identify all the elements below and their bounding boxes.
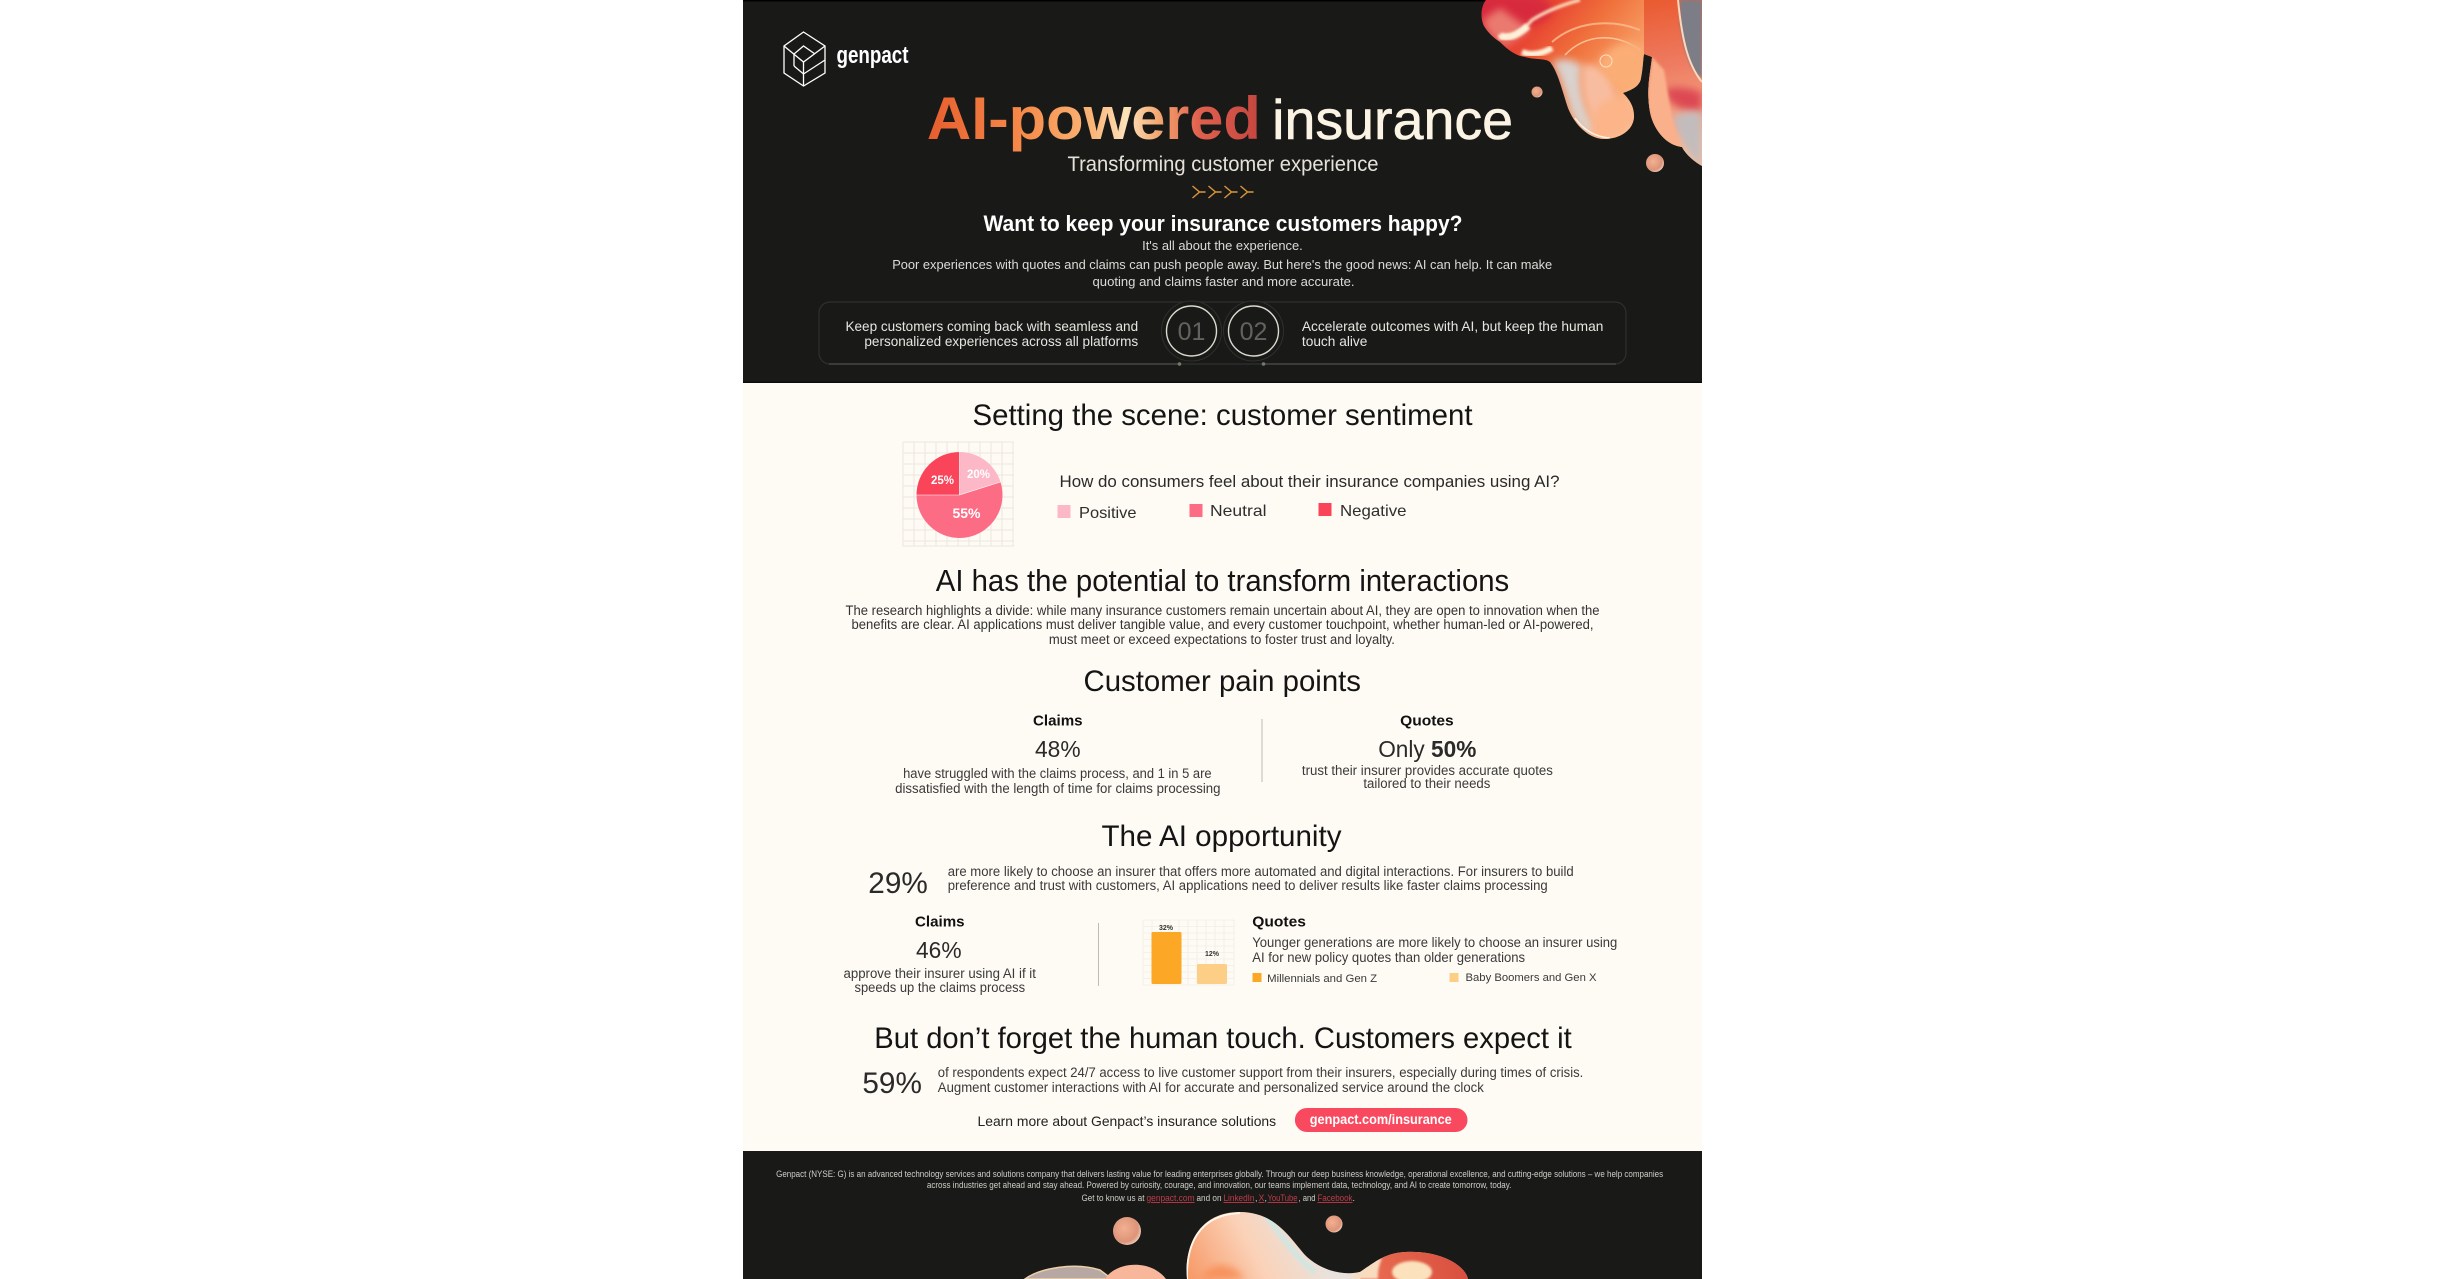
subtitle: Transforming customer experience: [1068, 153, 1378, 176]
decorative blob: footer centre: [1186, 1212, 1468, 1279]
title: insurance: [1272, 88, 1513, 151]
text block: social links: genpact.com: [1146, 1193, 1194, 1203]
text block: research divide: benefits are clear. AI applications must deliver tangible value, and every customer touchpoint, whether human-led or AI-powered,: [852, 617, 1594, 632]
takeaway 01 text: personalized experiences across all platforms: [864, 333, 1138, 349]
text block: social links: Get to know us at: [1082, 1193, 1145, 1203]
text block: social links: ,: [1264, 1193, 1267, 1203]
text block: social links: X: [1258, 1193, 1264, 1203]
text block: automated interactions: preference and trust with customers, AI applications need to deliver results like faster claims processing: [948, 878, 1548, 893]
text block: social links: YouTube: [1268, 1193, 1298, 1203]
panel: opportunity claims: Claims: [915, 914, 965, 930]
pie chart: customer sentiment: 25%: [931, 475, 954, 487]
text block: social links: [1082, 1193, 1355, 1203]
chart legend: sentiment: Neutral: [1210, 503, 1266, 520]
panel: cream body: [743, 383, 1702, 1151]
bar chart: quotes by generation: 32%: [1159, 925, 1174, 932]
decorative blob: top right: [1468, 0, 1704, 170]
panel: pain point claims: dissatisfied with the length of time for claims processing: [895, 781, 1220, 796]
decorative blob: footer left: [1025, 1265, 1166, 1279]
panel: pain point quotes: Only 50%: [1378, 736, 1476, 762]
button: genpact.com/insurance: genpact.com/insurance: [1310, 1112, 1452, 1127]
bar chart: quotes by generation: 12%: [1205, 951, 1220, 958]
heading: human touch: But don’t forget the human touch. Customers expect it: [874, 1022, 1572, 1055]
panel: pain point claims: 48%: [1035, 736, 1081, 762]
decorative sphere: small: [1532, 86, 1542, 98]
icon: orange arrow row: [1192, 186, 1254, 198]
panel: pain point quotes: tailored to their needs: [1363, 776, 1491, 791]
panel: opportunity quotes: [1252, 914, 1617, 985]
intro text block: Poor experiences with quotes and claims can push people away. But here's the good news: AI can help. It can make: [892, 257, 1552, 272]
panel: opportunity quotes: Younger generations are more likely to choose an insurer using: [1252, 934, 1617, 950]
takeaway 02 text: Accelerate outcomes with AI, but keep the human: [1302, 318, 1603, 334]
panel: pain point claims: have struggled with the claims process, and 1 in 5 are: [903, 766, 1212, 781]
text block: social links: , and: [1298, 1193, 1316, 1203]
icon: genpact hexagon: [784, 32, 825, 86]
text block: live support: [938, 1065, 1583, 1095]
text block: research divide: [846, 603, 1600, 647]
chart legend: generations: Millennials and Gen Z: [1267, 973, 1377, 985]
panel: opportunity claims: [844, 914, 1036, 995]
logo wordmark: genpact: [836, 42, 909, 69]
panel: key takeaways 01 and 02: [819, 301, 1626, 366]
pie chart: customer sentiment: 20%: [967, 469, 990, 481]
badge 02: [1224, 301, 1284, 361]
pie chart: customer sentiment: 55%: [952, 505, 981, 521]
decorative sphere: footer right: [1326, 1216, 1342, 1232]
intro text block: It's all about the experience.: [1142, 238, 1303, 253]
panel: opportunity claims: approve their insurer using AI if it: [844, 966, 1036, 981]
panel: opportunity quotes: AI for new policy quotes than older generations: [1252, 949, 1525, 965]
takeaway 01 text: [846, 318, 1138, 349]
badge 01: 01: [1178, 318, 1205, 346]
infographic canvas: [743, 0, 1702, 1279]
takeaway 01 text: Keep customers coming back with seamless and: [846, 318, 1138, 334]
badge 01: [1162, 301, 1222, 361]
panel: dark footer: [743, 1151, 1702, 1279]
takeaway 02 text: [1302, 318, 1603, 349]
text block: company boilerplate: across industries get ahead and stay ahead. Powered by curiosity, courage, and innovation, our teams implement data, technology, and AI to create tomorrow, today.: [927, 1180, 1511, 1190]
chart legend: sentiment: Negative: [1340, 503, 1407, 520]
text block: social links: ,: [1255, 1193, 1257, 1203]
chart legend: sentiment: Positive: [1079, 505, 1137, 522]
panel: pain point quotes: trust their insurer provides accurate quotes: [1302, 763, 1553, 778]
text block: company boilerplate: Genpact (NYSE: G) is an advanced technology services and solutions company that delivers lasting value for leading enterprises globally. Through our deep business knowledge, operational excellence, and cutting-edge solutions – we help companies: [776, 1169, 1664, 1179]
intro heading: Want to keep your insurance customers happy?: [984, 211, 1462, 236]
chart legend: generations: Baby Boomers and Gen X: [1466, 972, 1597, 984]
panel: pain point claims: [895, 712, 1220, 796]
text block: research divide: The research highlights a divide: while many insurance customers remain uncertain about AI, they are open to innovation when the: [846, 603, 1600, 618]
text block: live support: Augment customer interactions with AI for accurate and personalized service around the clock: [938, 1080, 1484, 1095]
panel: dark header: [743, 0, 1702, 383]
icon: connector dots: [1178, 362, 1265, 366]
heading: setting the scene: Setting the scene: customer sentiment: [972, 399, 1473, 432]
chart legend: sentiment: [1058, 503, 1407, 522]
decorative sphere: footer left: [1113, 1217, 1141, 1245]
text block: social links: .: [1352, 1193, 1355, 1203]
heading: the AI opportunity: The AI opportunity: [1102, 820, 1342, 853]
pie chart: customer sentiment: [903, 442, 1014, 546]
badge 02: 02: [1240, 318, 1267, 346]
text block: automated interactions: [948, 864, 1574, 893]
heading: customer pain points: Customer pain points: [1084, 665, 1361, 698]
text block: research divide: must meet or exceed expectations to foster trust and loyalty.: [1049, 632, 1395, 647]
title: AI-powered: [927, 85, 1261, 152]
text block: social links: and on: [1196, 1193, 1222, 1203]
text block: automated interactions: are more likely to choose an insurer that offers more automated and digital interactions. For insurers to build: [948, 864, 1574, 879]
intro text block: [892, 238, 1552, 289]
stat: 59%: 59%: [862, 1067, 922, 1100]
call to action text: Learn more about Genpact’s insurance solutions: [978, 1113, 1276, 1129]
text block: social links: LinkedIn: [1224, 1193, 1255, 1203]
panel: opportunity claims: 46%: [916, 937, 962, 963]
intro text block: quoting and claims faster and more accurate.: [1092, 274, 1354, 289]
panel: pain point claims: Claims: [1033, 712, 1083, 730]
heading: transform interactions: AI has the potential to transform interactions: [936, 563, 1509, 598]
panel: pain point quotes: [1302, 712, 1553, 791]
bar chart: quotes by generation: [1143, 920, 1234, 985]
panel: opportunity claims: speeds up the claims process: [854, 980, 1025, 995]
panel: pain point quotes: Quotes: [1400, 712, 1454, 730]
text block: social links: Facebook: [1318, 1193, 1353, 1203]
sentiment question: How do consumers feel about their insurance companies using AI?: [1060, 472, 1560, 491]
button: genpact.com/insurance: [1295, 1108, 1468, 1132]
panel: opportunity quotes: Quotes: [1252, 914, 1306, 930]
chart legend: generations: [1252, 972, 1597, 985]
stat: 29%: 29%: [868, 867, 928, 900]
decorative sphere: medium: [1646, 154, 1664, 172]
logo: genpact: [784, 32, 909, 86]
text block: live support: of respondents expect 24/7 access to live customer support from their insurers, especially during times of crisis.: [938, 1065, 1583, 1080]
title: [927, 85, 1513, 152]
takeaway 02 text: touch alive: [1302, 333, 1368, 349]
text block: company boilerplate: [776, 1169, 1664, 1190]
